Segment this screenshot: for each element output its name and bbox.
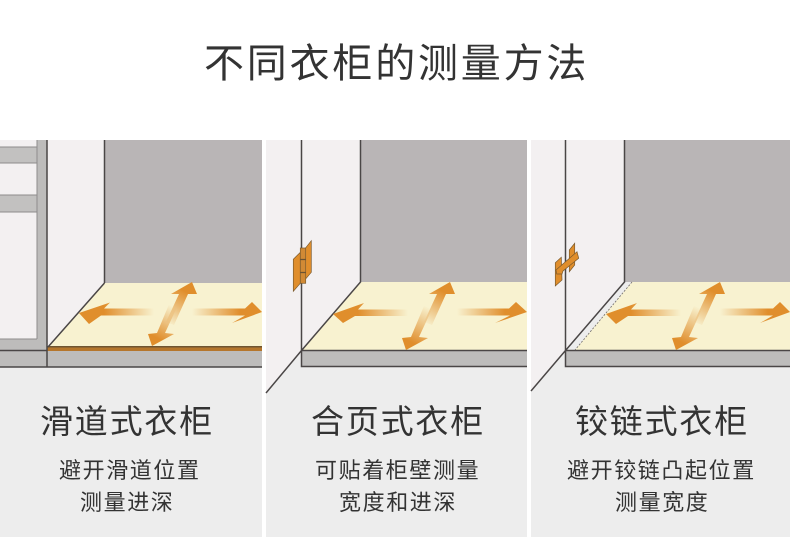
description: 可贴着柜壁测量 bbox=[315, 458, 480, 483]
arrow down bbox=[402, 306, 432, 350]
arrow right bbox=[192, 302, 262, 323]
base step bbox=[566, 350, 790, 366]
description bbox=[315, 458, 480, 515]
dashed offset line bbox=[575, 282, 632, 350]
panel: pivot hinge wardrobe bbox=[531, 140, 790, 537]
description: 宽度和进深 bbox=[339, 490, 457, 515]
arrow left bbox=[79, 302, 154, 324]
side wall bbox=[47, 140, 105, 350]
description: 测量进深 bbox=[80, 490, 174, 515]
arrow left bbox=[606, 303, 681, 324]
base step bbox=[302, 350, 527, 366]
floor bbox=[302, 282, 527, 350]
icon: pivot hinge bbox=[555, 243, 579, 286]
arrow up bbox=[166, 282, 197, 325]
heading: 滑道式衣柜 bbox=[40, 403, 214, 440]
arrow down bbox=[148, 302, 178, 346]
description: 避开铰链凸起位置 bbox=[567, 458, 756, 483]
back wall bbox=[360, 140, 527, 282]
description bbox=[59, 458, 201, 515]
panel: sliding wardrobe bbox=[0, 140, 262, 537]
icon: hinge bbox=[293, 241, 311, 291]
title: 不同衣柜的测量方法 bbox=[204, 42, 589, 86]
arrow right bbox=[720, 302, 790, 323]
description bbox=[567, 458, 756, 515]
side wall bbox=[266, 140, 360, 393]
arrow left bbox=[333, 303, 408, 323]
arrow up bbox=[424, 282, 455, 325]
track strip bbox=[47, 346, 262, 351]
arrow right bbox=[457, 302, 527, 323]
floor bbox=[575, 282, 790, 350]
base step bbox=[0, 351, 262, 367]
sliding door frame bbox=[0, 140, 47, 350]
heading: 合页式衣柜 bbox=[311, 403, 485, 440]
heading: 铰链式衣柜 bbox=[575, 403, 749, 440]
description: 避开滑道位置 bbox=[59, 458, 201, 483]
side wall bbox=[531, 140, 624, 391]
back wall bbox=[624, 140, 790, 282]
arrow up bbox=[694, 282, 725, 325]
description: 测量宽度 bbox=[615, 490, 709, 515]
panel: hinged wardrobe bbox=[266, 140, 527, 537]
arrow down bbox=[672, 306, 702, 350]
floor bbox=[48, 283, 262, 347]
back wall bbox=[104, 140, 262, 283]
